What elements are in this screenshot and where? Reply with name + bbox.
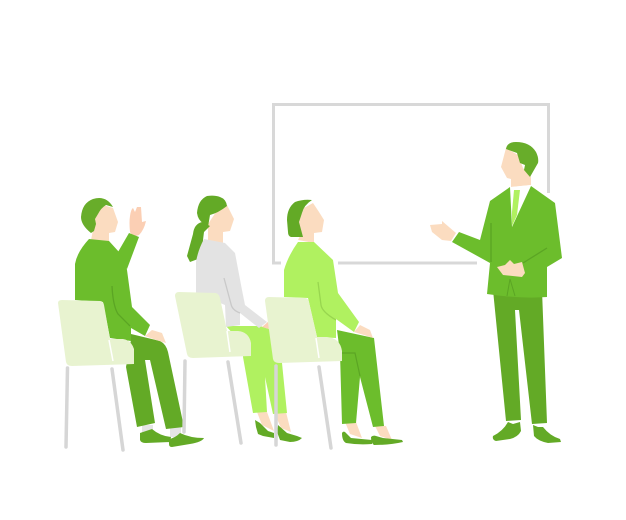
presenter hand left bbox=[430, 221, 456, 241]
ponytail bbox=[187, 222, 210, 262]
knee fold bbox=[340, 353, 360, 376]
person: woman with ponytail on chair bbox=[175, 196, 302, 443]
hand on knee bbox=[145, 330, 166, 343]
sleeve fold bbox=[112, 286, 130, 326]
chair legs bbox=[66, 368, 123, 450]
person: man raising hand on chair bbox=[58, 198, 204, 450]
arm fold bbox=[490, 223, 492, 262]
hand on stomach bbox=[497, 260, 525, 277]
hand on knee bbox=[262, 321, 269, 329]
hair bbox=[287, 200, 312, 237]
person: presenter in suit bbox=[430, 142, 562, 443]
hair bbox=[81, 198, 113, 233]
chair legs bbox=[184, 361, 241, 443]
jacket bbox=[75, 239, 150, 341]
socks bbox=[142, 425, 181, 437]
person: woman in light green on chair bbox=[265, 200, 403, 448]
jacket bbox=[452, 186, 562, 298]
shoes bbox=[493, 422, 561, 443]
shoes bbox=[140, 429, 204, 447]
trousers bbox=[126, 334, 184, 429]
neck and face bbox=[298, 203, 324, 243]
arm fold right bbox=[523, 248, 547, 263]
whiteboard bbox=[274, 104, 548, 263]
chair legs bbox=[276, 366, 331, 448]
hair bbox=[197, 196, 227, 227]
neck and face bbox=[91, 205, 118, 243]
jacket slit bbox=[507, 279, 515, 296]
shoes bbox=[255, 420, 302, 442]
neck and face bbox=[501, 148, 531, 187]
chair seat and back bbox=[58, 300, 134, 366]
raised hand bbox=[130, 207, 146, 237]
neck and face bbox=[208, 205, 234, 243]
hand on knee bbox=[354, 325, 373, 338]
tie bbox=[512, 190, 520, 226]
shoes bbox=[342, 432, 403, 445]
trousers bbox=[226, 326, 287, 414]
ankles bbox=[345, 422, 392, 440]
hair bbox=[506, 142, 538, 177]
shirt collar bbox=[511, 185, 531, 227]
jacket bbox=[284, 242, 359, 338]
raised arm bbox=[118, 233, 139, 269]
ankles bbox=[257, 412, 291, 432]
sleeve fold bbox=[224, 278, 240, 313]
blouse bbox=[196, 239, 267, 328]
trousers bbox=[493, 290, 547, 424]
chair seat and back bbox=[175, 292, 251, 358]
chair seat and back bbox=[265, 297, 342, 363]
trousers bbox=[337, 330, 384, 427]
sleeve fold bbox=[318, 282, 336, 320]
